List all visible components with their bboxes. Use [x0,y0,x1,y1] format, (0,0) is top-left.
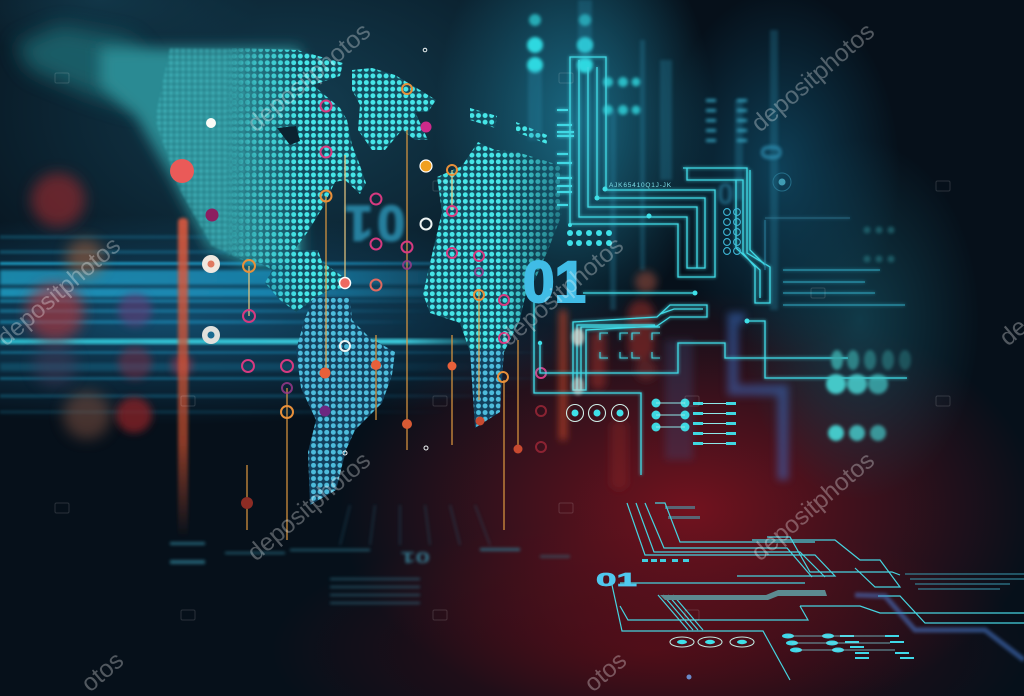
Greenland [352,68,436,150]
pale pill lights [572,328,584,395]
left bokeh lights [26,173,193,439]
blurred lower-left circuit and digits: 01 [401,548,430,566]
depositphotos watermarks: depositphotos [746,447,880,567]
floor target dots [670,637,754,647]
depositphotos watermarks: depositphotos [495,232,629,352]
map ring markers [242,48,546,455]
blurred left teal landmass [100,48,302,268]
blue glow trace [733,318,783,480]
floor circuit reflection [612,503,1024,680]
rotated binary digits behind map: 01 [345,195,405,251]
blurred binary zeros: 0 [754,144,787,161]
blurred top circuit dots [527,14,640,115]
large binary label 01: 01 [523,250,586,315]
blurred binary zeros: 0 [717,178,734,211]
circuit label code: AJK65410Q1J-JK [609,182,672,189]
depositphotos watermarks: depositphotos [242,18,376,138]
islands [470,108,497,128]
North America blurred part [155,48,300,266]
red bokeh behind circuit [560,271,693,490]
ring target upper right [773,173,791,191]
floor binary label 01: 01 [596,570,637,591]
depositphotos watermarks: depositphotos [242,447,376,567]
floor connector pins [782,634,914,659]
blurred top-left teal haze [15,25,150,110]
circuit node dots [538,186,750,345]
ringed target dots [566,404,628,422]
map: world dot continents [155,46,562,505]
Africa and Europe [423,142,562,352]
blurred ticks upper right [706,99,747,142]
North America [232,48,366,312]
blurred binary zeros [717,144,787,211]
ring grid chip [724,209,740,254]
map gap [277,126,300,145]
South America [296,297,395,505]
blurred right dot cluster [826,226,911,441]
circuit ticks left of map edge [557,110,574,205]
connector pin rows [652,398,736,445]
horizontal light streaks [0,235,560,414]
floor chip dots [642,506,700,562]
blurred vertical tech stripes [528,0,778,310]
vertical connector lines [247,130,518,540]
vertical orange light bar [178,218,188,538]
depositphotos watermarks: depositphotos [746,18,880,138]
main circuit traces [534,57,907,475]
map filled markers [170,118,522,509]
blurred lower-left circuit and digits [170,505,570,604]
camera watermarks [55,73,950,620]
